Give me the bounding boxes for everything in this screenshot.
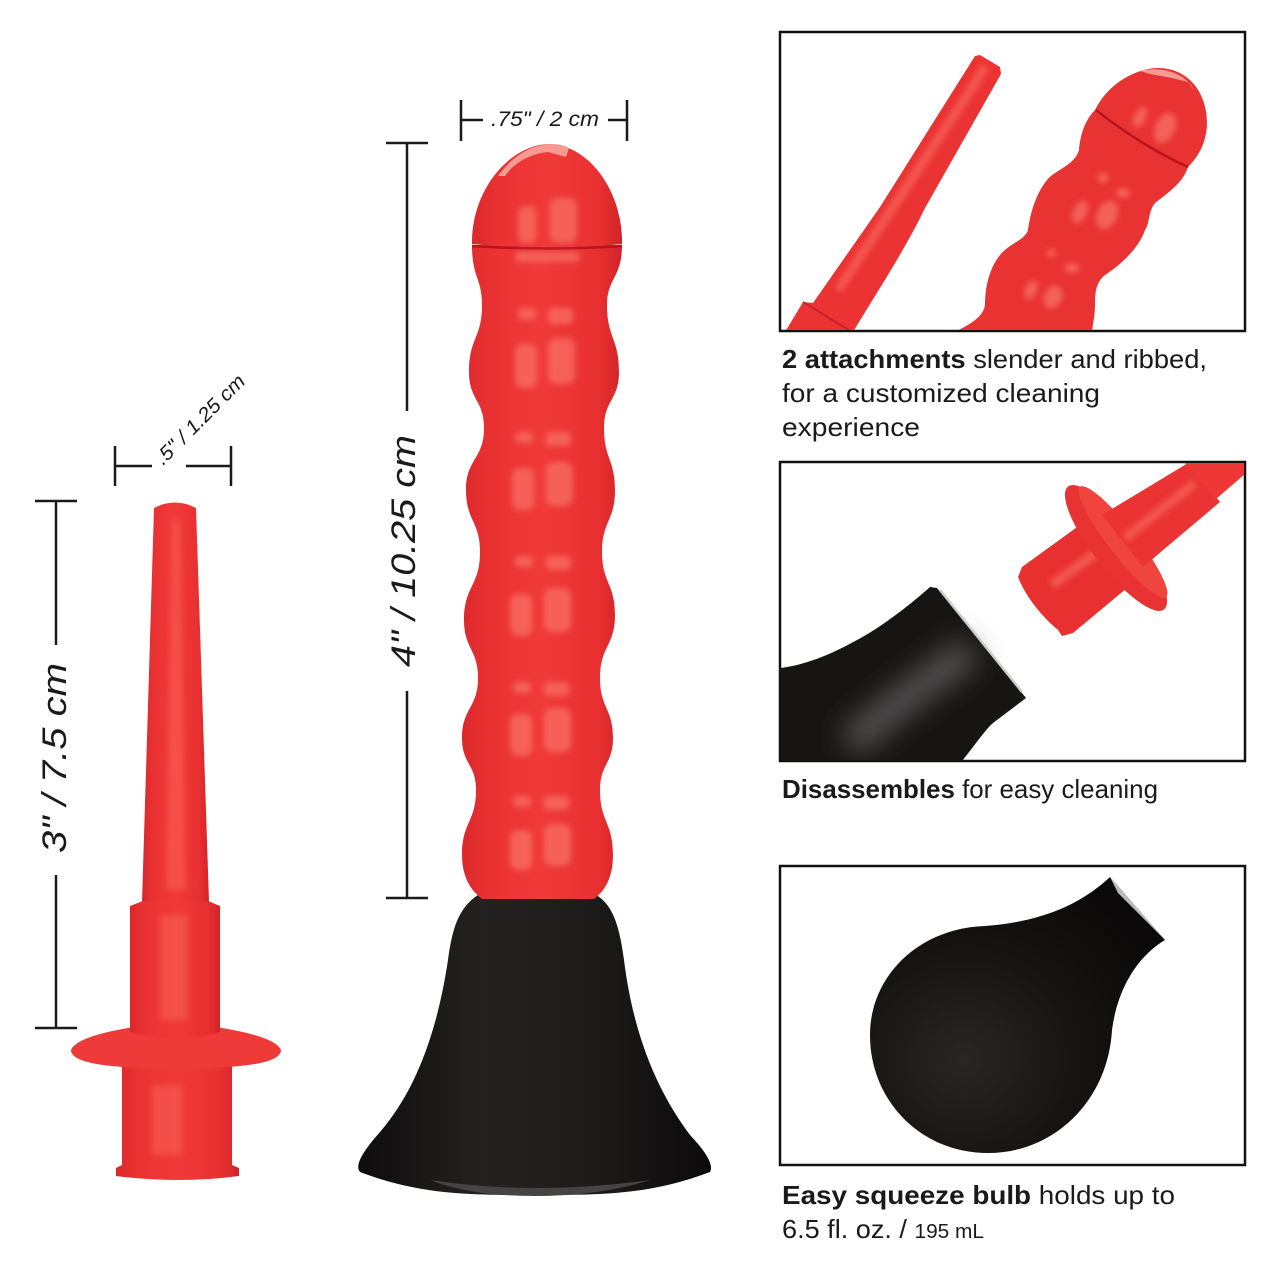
tip highlight [1140,69,1194,90]
slender nozzle highlights [152,520,188,1155]
slender nozzle shaft [142,502,209,902]
collar edge [803,302,852,332]
panel: disassembles [780,462,1245,761]
bell base [358,895,711,1195]
bell base lower rim [430,1180,650,1196]
open end edge [940,590,1022,692]
flange face [1078,486,1168,598]
ribbed tip dome [472,144,622,248]
slender nozzle collar [130,901,220,1039]
ribbed attachment illustration [358,144,711,1196]
tip seam [472,246,622,248]
dimension: ribbed width [461,100,627,141]
ribbed shaft [462,245,622,899]
paired highlights [510,198,580,870]
caption: two attachments: 2 attachments slender and ribbed, [782,344,1207,374]
nozzle flange [1064,485,1168,611]
ribbed attachment detail [955,68,1207,332]
nozzle lower cylinder [1018,525,1127,636]
dimension: ribbed width: .75" / 2 cm [491,108,599,131]
dimension: slender length [35,501,77,1028]
dimension: slender width: .5" / 1.25 cm [151,371,250,470]
dimension: ribbed length [385,143,428,898]
caption: two attachments: experience [782,412,920,442]
cylinder highlight [1052,550,1100,585]
seam [1096,110,1188,167]
caption: squeeze bulb: 6.5 fl. oz. / 195 mL [782,1214,984,1244]
bulb [870,877,1165,1153]
caption: squeeze bulb: Easy squeeze bulb holds up to [782,1180,1175,1210]
tip highlight [498,144,569,176]
neck sheen [850,650,970,745]
caption: squeeze bulb [782,1180,1175,1244]
slender nozzle detail [785,55,1001,332]
slender attachment illustration [71,502,281,1180]
dimension: slender length: 3" / 7.5 cm [36,663,74,853]
panel: two attachments [780,32,1245,332]
nozzle tip [1185,463,1245,499]
photo frame [780,866,1245,1165]
photo frame [780,462,1245,761]
caption: disassembles: Disassembles for easy cleaning [782,774,1158,804]
caption: two attachments [782,344,1207,442]
paired highlights [1021,104,1181,312]
bulb opening [1110,877,1165,940]
photo frame [780,32,1245,331]
dimension: ribbed length: 4" / 10.25 cm [385,435,423,667]
dimension: slender width [115,371,250,486]
nozzle collar [1102,463,1220,567]
panel: squeeze bulb [780,866,1245,1165]
slender nozzle lower cylinder [116,1060,239,1180]
slender nozzle highlight [838,66,985,290]
bulb neck detail [781,587,1026,761]
slender nozzle flange [71,1028,281,1069]
collar highlight [1125,483,1195,538]
caption: two attachments: for a customized cleaning [782,378,1100,408]
